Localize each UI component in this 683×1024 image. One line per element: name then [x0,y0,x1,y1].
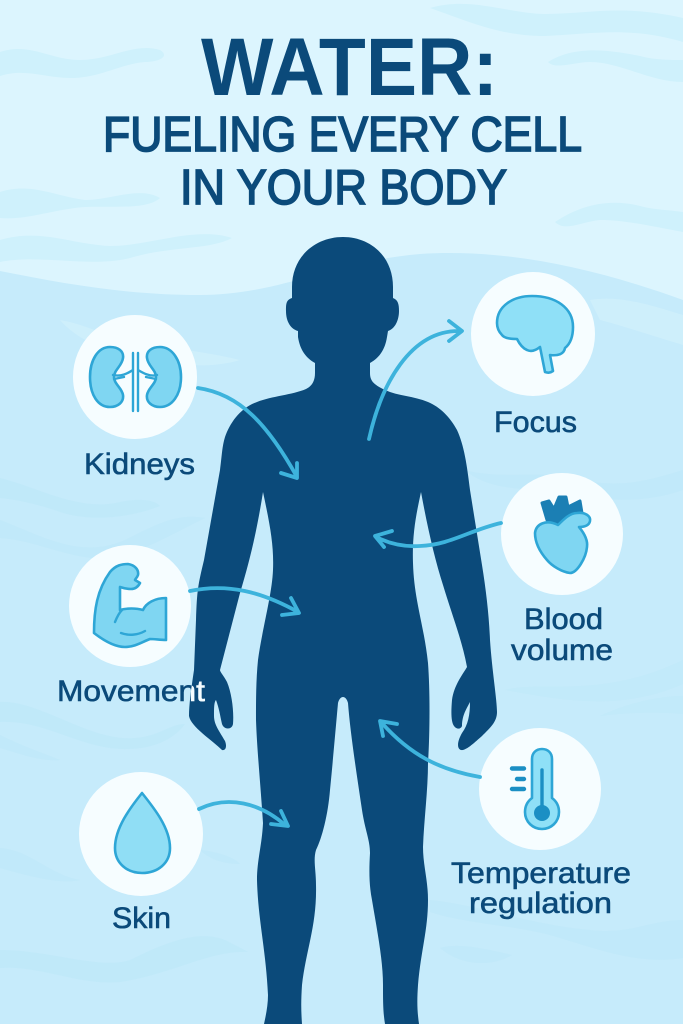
panel: blood volume [375,473,623,667]
label: focus: Focus [494,406,577,439]
icon circle: skin [79,772,203,896]
panel: movement [57,545,299,708]
icon: heart [535,497,590,573]
label: kidneys: Kidneys [84,448,195,481]
icon circle: movement [69,545,191,667]
icon: thermometer [512,749,559,829]
panel: temperature regulation [380,721,631,920]
panel: kidneys [73,315,297,481]
title [103,22,582,215]
label overlap: movement on hand: Movement [57,675,206,708]
label: blood volume [511,603,613,667]
icon: brain [497,296,573,373]
title line: fueling every cell: FUELING EVERY CELL [103,108,582,162]
label: temperature regulation: Temperature [451,857,631,890]
panel: skin [79,772,288,935]
icon: flexed arm [94,564,166,647]
arrow: body to focus [369,321,462,439]
icon: kidneys [90,347,181,411]
label: temperature regulation: regulation [469,887,612,920]
arrow: heart to body [375,523,501,547]
icon circle: thermometer [479,728,601,850]
body silhouette [189,237,497,1024]
arrow: kidneys to body [198,388,297,478]
label: movement: Movement [57,675,206,708]
arrow: movement to body [190,588,299,615]
title line: WATER: WATER: [201,22,498,113]
icon circle: focus [471,272,595,396]
label: skin: Skin [112,902,171,935]
arrow: temperature to body [380,721,480,777]
label: blood volume: volume [511,634,613,667]
icon circle: heart [501,473,623,595]
label: temperature regulation [451,857,631,920]
title line: in your body: IN YOUR BODY [180,161,507,215]
background: lower water tone [0,253,683,1024]
arrow: skin to body [199,802,288,826]
label: blood volume: Blood [524,603,603,636]
icon circle: kidneys [73,315,197,439]
icon: water drop [115,793,170,873]
panel: focus [369,272,595,439]
